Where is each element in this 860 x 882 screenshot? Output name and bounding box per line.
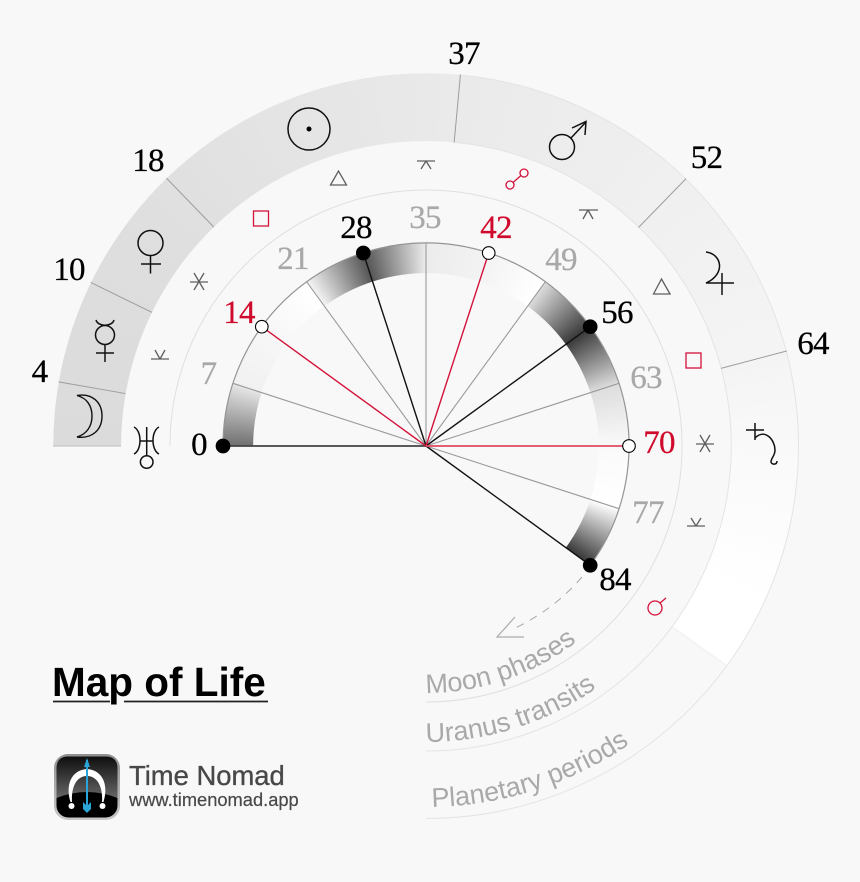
icon: uranus	[134, 427, 159, 468]
uranus transit aspects: gray symbols	[151, 161, 714, 526]
moon phase ages: 49	[545, 242, 577, 278]
moon phase ages: 21	[277, 241, 309, 277]
icon: moon	[77, 395, 102, 437]
icon: mercury	[96, 320, 114, 362]
icon: sun	[288, 108, 330, 150]
ring caption: uranus transits: Uranus transits	[427, 678, 594, 742]
planetary period ages	[32, 36, 829, 390]
icon: venus	[138, 230, 163, 274]
moon phase ages: 70	[643, 425, 675, 461]
planetary period ages: 37	[448, 36, 480, 72]
planetary period ages: 4	[32, 354, 48, 390]
moon phase ages: 63	[630, 360, 662, 396]
age markers, filled and open	[216, 246, 635, 572]
moon phase ages: 56	[601, 295, 633, 331]
title: Map of Life	[52, 659, 266, 705]
planetary period ages: 18	[132, 143, 164, 179]
planetary period ages: 52	[691, 140, 722, 176]
icon: mars	[550, 122, 586, 160]
planetary period ages: 64	[797, 326, 829, 362]
moon phase ages: 0	[191, 427, 207, 463]
radial spokes, red	[262, 253, 629, 446]
uranus transit aspects: red symbols	[254, 169, 701, 615]
radial spokes, black	[223, 253, 590, 565]
moon phase ages: 77	[632, 495, 664, 531]
icon: Time Nomad app	[54, 754, 120, 820]
planetary periods ring band	[53, 74, 682, 446]
brand url: www.timenomad.app	[128, 789, 299, 810]
moon phase ages: 28	[340, 210, 372, 246]
icon: saturn	[746, 423, 777, 464]
radial spokes, gray	[233, 243, 619, 509]
concentric ring outlines	[170, 75, 799, 818]
planetary period ages: 10	[53, 252, 85, 288]
ring caption: moon phases: Moon phases	[427, 632, 575, 694]
ring caption: planetary periods: Planetary periods	[433, 734, 628, 807]
icon: jupiter	[706, 252, 734, 295]
moon phase ages: 14	[223, 295, 255, 331]
moon phases gradient band	[224, 244, 627, 560]
moon phase ages: 84	[599, 562, 631, 598]
moon phase ages: 42	[480, 210, 512, 246]
planetary period dividers	[53, 75, 787, 446]
inner arc and dashed continuation arrow	[223, 243, 629, 637]
moon phase ages: 35	[409, 200, 441, 236]
moon phase ages: 7	[201, 356, 217, 392]
moon phase ages	[191, 200, 675, 598]
brand name: Time Nomad	[129, 760, 285, 791]
